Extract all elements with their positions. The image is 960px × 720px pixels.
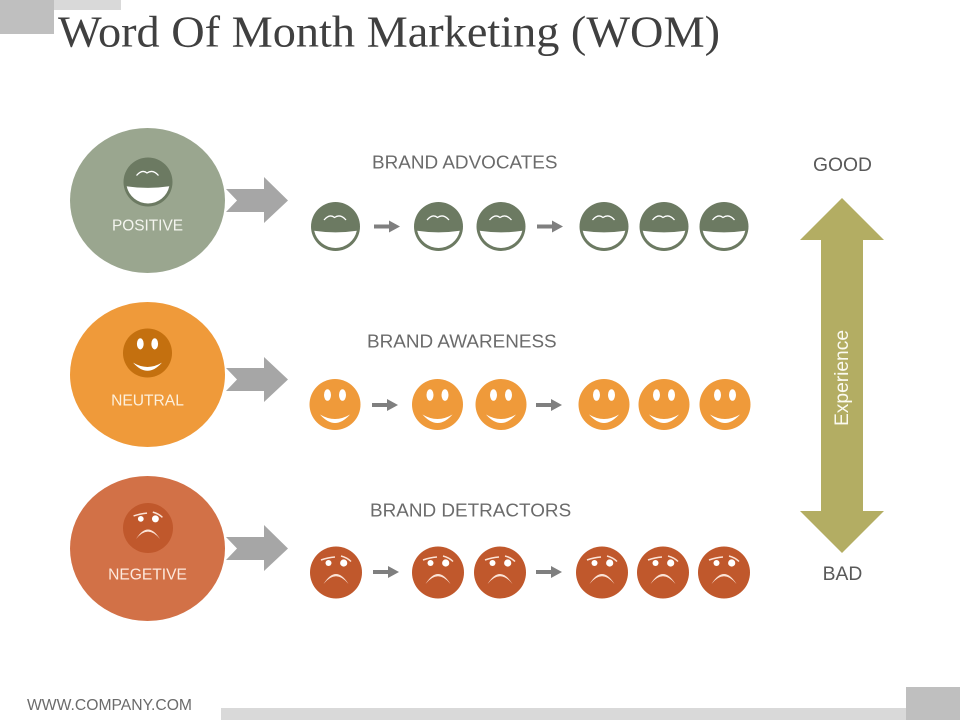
- arrow: experience double arrow: Experience: [832, 330, 853, 426]
- heading: brand awareness: BRAND AWARENESS: [367, 332, 557, 352]
- panel: neutral circle: [70, 302, 225, 447]
- icon: neutral face: [123, 328, 172, 378]
- label: bad: BAD: [823, 564, 862, 585]
- icon: positive face: [124, 158, 172, 206]
- row: neutral faces: [310, 379, 750, 430]
- arrow: neutral to awareness: [226, 357, 288, 402]
- heading: brand advocates: BRAND ADVOCATES: [372, 152, 557, 174]
- row: negative faces: [310, 546, 750, 598]
- label: good: GOOD: [813, 155, 872, 176]
- heading: brand detractors: BRAND DETRACTORS: [370, 500, 571, 522]
- decorative footer bar: [221, 687, 960, 720]
- icon: negative face: [123, 503, 173, 553]
- title: Word Of Month Marketing (WOM): [58, 8, 720, 56]
- arrow: positive to advocates: [226, 177, 288, 223]
- arrow: negative to detractors: [226, 525, 288, 571]
- panel: negative circle: [70, 476, 225, 621]
- arrow: experience double arrow: [800, 198, 884, 553]
- panel: neutral circle: NEUTRAL: [111, 392, 184, 410]
- panel: negative circle: NEGETIVE: [108, 566, 187, 584]
- footer text: WWW.COMPANY.COM: [27, 697, 192, 714]
- panel: positive circle: POSITIVE: [112, 218, 183, 234]
- panel: positive circle: [70, 128, 225, 273]
- decorative corner block: top left: [0, 0, 121, 34]
- row: positive faces: [311, 202, 748, 251]
